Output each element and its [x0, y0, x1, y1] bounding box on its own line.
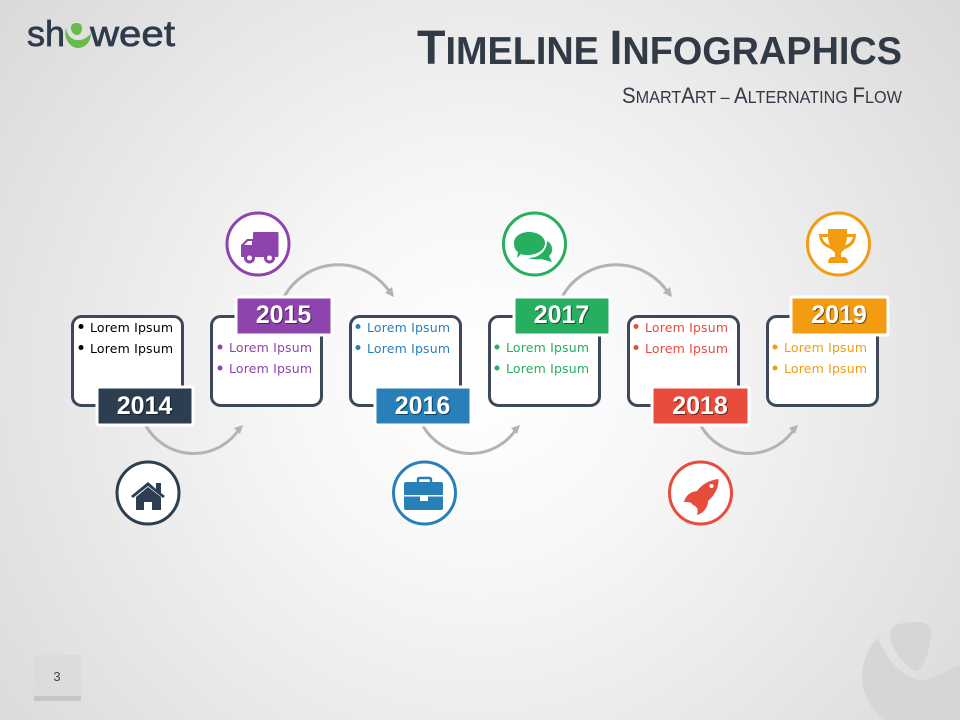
year label 2014: 2014 [117, 392, 172, 420]
bullets 2019 [772, 340, 867, 376]
arrow: 2017 to 2018 [562, 265, 672, 297]
bullets 2014 [78, 320, 173, 356]
panel: 2014 [72, 316, 193, 425]
panel: 2019 [768, 297, 888, 406]
logo [27, 13, 175, 54]
panel: 2018 [628, 316, 749, 425]
year label 2016: 2016 [395, 392, 450, 420]
arrow: 2015 to 2016 [284, 265, 394, 297]
year label 2019: 2019 [811, 301, 867, 329]
arrow: 2014 to 2015 [146, 425, 243, 453]
bullets 2016 [356, 320, 450, 356]
panel: 2015 [212, 297, 332, 406]
year label 2018: 2018 [672, 392, 728, 420]
bullets 2014: Lorem Ipsum [90, 341, 173, 356]
panel: 2017 [490, 297, 610, 406]
arrow: 2016 to 2017 [423, 425, 520, 453]
bullets 2015 [218, 340, 312, 376]
page number [34, 655, 81, 701]
bullets 2019: Lorem Ipsum [784, 361, 867, 376]
bullets 2018: Lorem Ipsum [645, 320, 728, 335]
bullets 2015: Lorem Ipsum [229, 361, 312, 376]
logo mark [65, 23, 91, 48]
arrow: 2018 to 2019 [701, 425, 798, 453]
bullets 2016: Lorem Ipsum [367, 320, 450, 335]
bullets 2017: Lorem Ipsum [506, 340, 589, 355]
icon: house [117, 462, 179, 524]
year label 2015: 2015 [256, 301, 311, 329]
bullets 2017: Lorem Ipsum [506, 361, 589, 376]
bullets 2019: Lorem Ipsum [784, 340, 867, 355]
logo: weet [89, 13, 175, 54]
icon: briefcase [394, 462, 456, 524]
bullets 2018: Lorem Ipsum [645, 341, 728, 356]
panel: 2016 [350, 316, 471, 425]
watermark logo [862, 622, 960, 720]
icon: trophy [808, 213, 870, 275]
bullets 2015: Lorem Ipsum [229, 340, 312, 355]
icon: truck [227, 213, 289, 275]
title: TIMELINE INFOGRAPHICS [417, 22, 902, 75]
bullets 2014: Lorem Ipsum [90, 320, 173, 335]
bullets 2016: Lorem Ipsum [367, 341, 450, 356]
icon: speech bubbles [504, 213, 566, 275]
subtitle: SMARTART – ALTERNATING FLOW [622, 83, 902, 108]
page number: 3 [53, 669, 61, 684]
icon: rocket [670, 462, 732, 524]
logo: sh [27, 13, 65, 54]
year label 2017: 2017 [534, 301, 589, 329]
bullets 2018 [634, 320, 728, 356]
bullets 2017 [494, 340, 589, 376]
